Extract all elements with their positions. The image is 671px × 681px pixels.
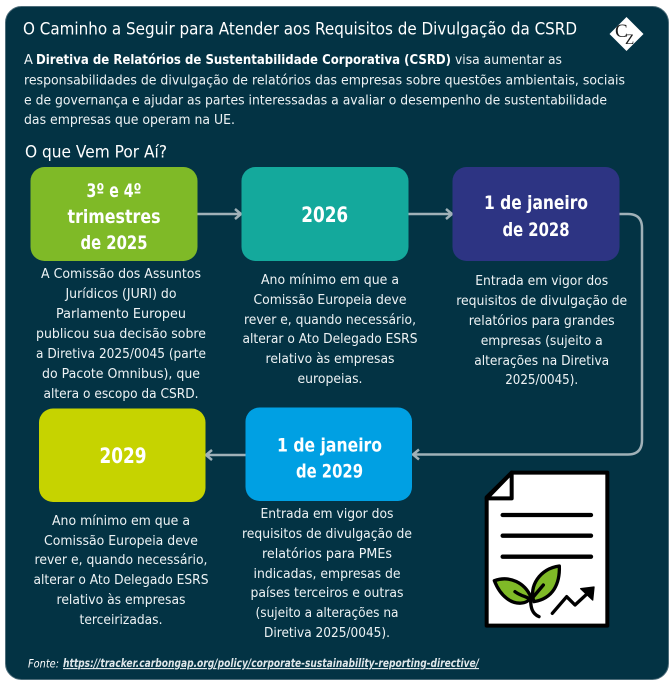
- text: card 4 description: alterar o Ato Delegado ESRS: [34, 573, 208, 588]
- card: 3º e 4º trimestres de 2025: [30, 167, 198, 261]
- text: card 5 description: relatórios para PMEs: [262, 547, 392, 562]
- arrow: card 5 to card 4: [206, 450, 246, 460]
- text: card 4 description: Comissão Europeia deve: [44, 534, 198, 549]
- text: card 4 description: [34, 514, 208, 628]
- card: 1 de janeiro de 2029: [246, 408, 412, 501]
- text: card 3 description: empresas (sujeito a: [481, 334, 603, 349]
- intro text: [24, 53, 625, 128]
- icon: logo: C: [615, 21, 628, 42]
- card: 2029: [39, 408, 206, 502]
- text: card 2 description: Ano mínimo em que a: [261, 273, 399, 288]
- intro text: Diretiva de Relatórios de Sustentabilidade Corporativa (CSRD): [36, 53, 451, 68]
- text: card 2 description: rever e, quando necessário,: [244, 313, 416, 328]
- text: card 4 description: relativo às empresas: [56, 593, 186, 608]
- text: card 3 description: [456, 274, 627, 388]
- text: card 1 description: publicou sua decisão sobre: [36, 327, 206, 342]
- title: O Caminho a Seguir para Atender aos Requisitos de Divulgação da CSRD: [23, 20, 577, 40]
- text: card 2 description: relativo às empresas: [266, 352, 395, 367]
- text: card 5 description: indicadas, empresas de: [254, 567, 400, 582]
- card: 3º e 4º trimestres de 2025: de 2025: [80, 232, 148, 254]
- text: card 3 description: Entrada em vigor dos: [475, 274, 608, 289]
- text: card 5 description: [242, 507, 412, 641]
- text: card 1 description: A Comissão dos Assuntos: [41, 267, 201, 282]
- text: card 1 description: do Pacote Omnibus), que: [42, 367, 200, 382]
- card: 1 de janeiro de 2029: de 2029: [296, 461, 363, 483]
- card: 1 de janeiro de 2028: 1 de janeiro: [484, 192, 588, 214]
- arrow: card 2 to card 3: [408, 209, 452, 219]
- card: 1 de janeiro de 2029: 1 de janeiro: [277, 435, 382, 457]
- text: card 5 description: países terceiros e outras: [250, 586, 404, 601]
- card: 3º e 4º trimestres de 2025: 3º e 4º: [86, 180, 142, 202]
- text: card 1 description: Parlamento Europeu: [56, 307, 186, 322]
- text: card 5 description: (sujeito a alterações na: [256, 606, 398, 621]
- text: card 2 description: europeias.: [298, 372, 362, 387]
- text: card 3 description: requisitos de divulgação de: [456, 294, 627, 309]
- card: 2026: 2026: [301, 203, 348, 227]
- intro text: A: [24, 53, 33, 68]
- text: card 5 description: Diretiva 2025/0045).: [264, 626, 390, 641]
- card: 2026: [242, 167, 408, 261]
- icon: document with plant and growth arrow: [487, 473, 607, 626]
- source footer: https://tracker.carbongap.org/policy/corporate-sustainability-reporting-directive/: [63, 656, 480, 670]
- intro text: responsabilidades de divulgação de relatórios das empresas sobre questões ambientais, sociais: [24, 74, 625, 88]
- text: card 2 description: Comissão Europeia deve: [254, 293, 406, 308]
- text: card 4 description: terceirizadas.: [80, 613, 162, 628]
- text: card 2 description: [242, 273, 418, 387]
- text: card 1 description: Jurídicos (JURI) do: [65, 287, 177, 302]
- intro text: das empresas que operam na UE.: [24, 113, 235, 128]
- text: card 5 description: Entrada em vigor dos: [260, 507, 394, 522]
- intro text: e de governança e ajudar as partes interessadas a avaliar o desempenho de sustentabilidade: [24, 94, 607, 108]
- icon: logo: Z: [625, 32, 634, 48]
- text: card 4 description: rever e, quando necessário,: [34, 553, 208, 568]
- text: card 5 description: requisitos de divulgação de: [242, 527, 412, 542]
- text: card 1 description: a Diretiva 2025/0045 (parte: [36, 347, 206, 362]
- card: 3º e 4º trimestres de 2025: trimestres: [68, 206, 160, 228]
- text: card 3 description: relatórios para grandes: [469, 314, 615, 329]
- text: card 1 description: [36, 267, 206, 402]
- text: card 2 description: alterar o Ato Delegado ESRS: [242, 332, 418, 347]
- card: 1 de janeiro de 2028: de 2028: [502, 219, 570, 241]
- text: card 4 description: Ano mínimo em que a: [52, 514, 190, 529]
- card: 2029: 2029: [100, 444, 146, 468]
- card: 1 de janeiro de 2028: [452, 167, 620, 261]
- arrow: card 3 to card 5: [413, 214, 642, 460]
- text: card 3 description: alterações na Diretiva: [474, 354, 609, 369]
- intro text: visa aumentar as: [455, 53, 562, 68]
- text: card 3 description: 2025/0045).: [505, 373, 578, 388]
- source footer: Fonte:: [28, 656, 59, 670]
- section heading: O que Vem Por Aí?: [25, 142, 167, 162]
- arrow: card 1 to card 2: [197, 209, 241, 219]
- text: card 1 description: altera o escopo da CSRD.: [44, 387, 198, 402]
- icon: logo: [610, 17, 644, 51]
